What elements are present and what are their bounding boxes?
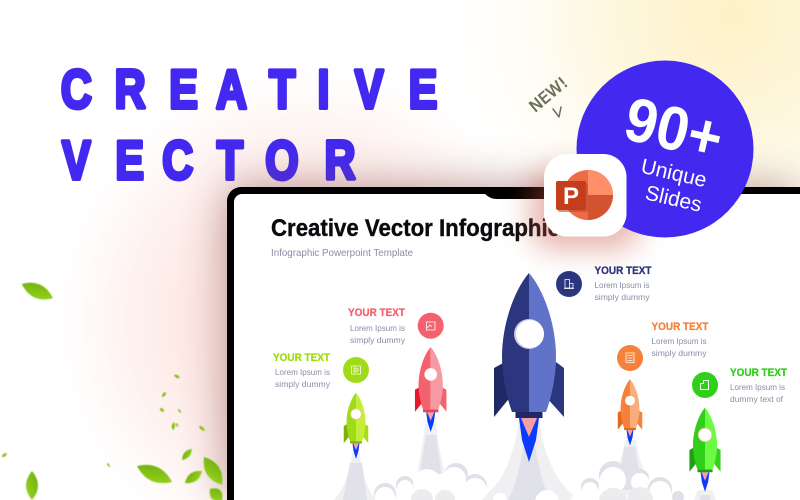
callout: lime: YOUR TEXT	[273, 352, 330, 364]
purple badge: 90+ unique slides	[576, 60, 754, 238]
callout: green	[692, 367, 787, 404]
laptop screen frame	[227, 187, 800, 500]
callout: lime: Lorem Ipsum is	[275, 367, 330, 377]
powerpoint icon	[544, 154, 626, 236]
callout: green: YOUR TEXT	[730, 367, 787, 379]
rocket: green	[689, 408, 721, 492]
callout: lime: simply dummy	[275, 379, 331, 389]
title: creative vector: CREATIVE	[61, 59, 437, 120]
callout: green: dummy text of	[730, 394, 784, 404]
screen heading	[271, 215, 560, 259]
rocket: large blue	[494, 273, 564, 462]
callout: lime	[273, 352, 369, 389]
screen heading: Infographic Powerpoint Template	[271, 247, 413, 259]
callout: blue	[556, 265, 652, 302]
callout: orange: YOUR TEXT	[652, 321, 709, 333]
rocket trails	[334, 420, 716, 500]
exhaust clouds	[374, 461, 684, 500]
powerpoint icon: P	[563, 183, 579, 210]
callout: orange	[617, 321, 709, 371]
purple badge: 90+ unique slides: Unique	[639, 155, 709, 192]
title: creative vector: VECTOR	[62, 130, 355, 191]
callout: orange: simply dummy	[652, 348, 707, 358]
rocket: lime	[344, 393, 368, 459]
callout: blue: simply dummy	[594, 292, 650, 302]
callout: red: Lorem Ipsum is	[350, 323, 405, 333]
powerpoint icon glow	[530, 170, 640, 250]
rocket: red	[415, 347, 446, 432]
callout: red	[348, 307, 444, 345]
rocket: orange	[618, 379, 642, 445]
falling leaves	[1, 278, 228, 500]
callout: green: Lorem Ipsum is	[730, 382, 785, 392]
callout: red: YOUR TEXT	[348, 307, 405, 319]
title: creative vector	[61, 59, 437, 191]
purple badge: 90+ unique slides: 90+	[618, 85, 729, 174]
callout: blue: Lorem Ipsum is	[594, 280, 650, 290]
new badge note: NEW!	[525, 73, 572, 116]
screen heading: Creative Vector Infographic	[271, 215, 560, 242]
lower gray puffs	[411, 487, 653, 500]
callout: blue: YOUR TEXT	[594, 265, 652, 277]
purple badge: 90+ unique slides: Slides	[643, 181, 704, 217]
callout: red: simply dummy	[350, 335, 406, 345]
foreground white puffs	[375, 490, 586, 500]
callout: orange: Lorem Ipsum is	[652, 336, 706, 346]
frame shadow	[227, 187, 800, 500]
